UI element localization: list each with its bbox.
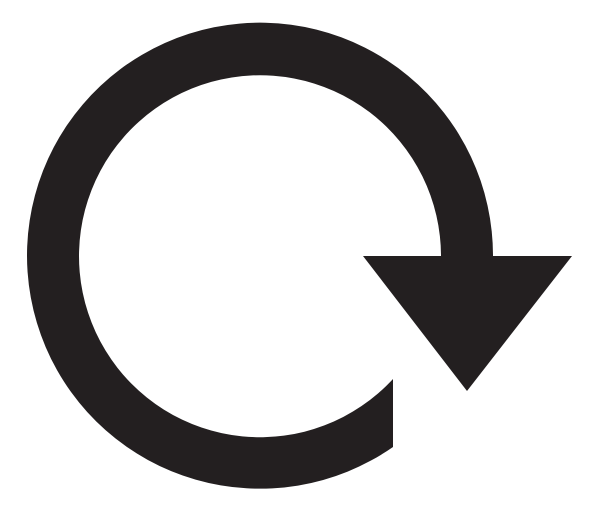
circular arrow ring: [27, 23, 493, 489]
arrowhead: [363, 256, 572, 391]
